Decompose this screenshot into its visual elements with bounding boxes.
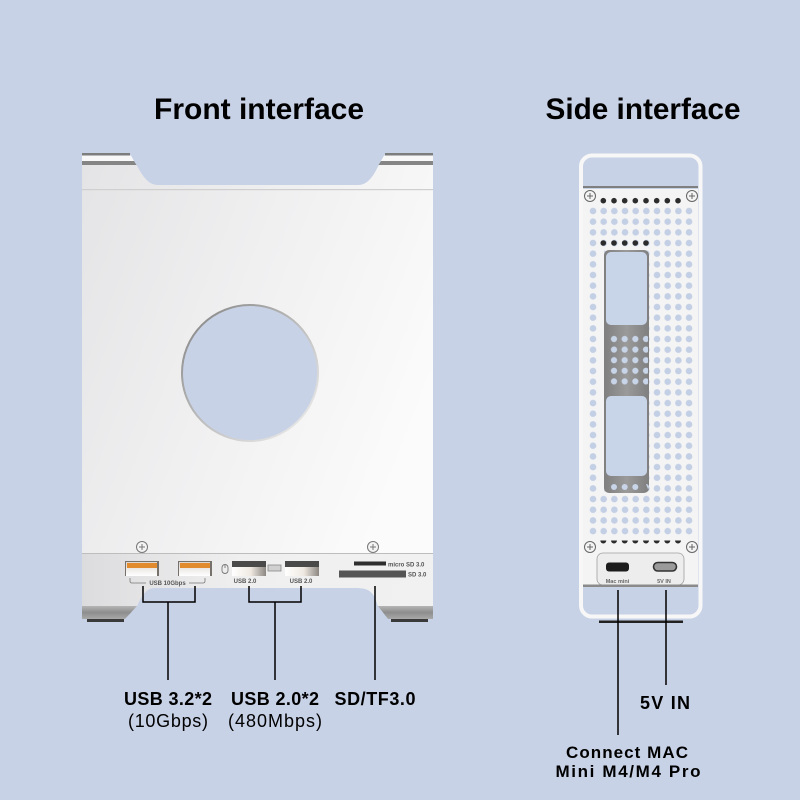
USB 2.0 labels: USB 2.0 [290,579,313,585]
front lower port band [82,553,433,606]
SD slot and label: SD 3.0 [408,572,427,578]
label: 5V IN: 5V IN [640,693,690,713]
side port panel [597,553,684,585]
connector lines: USB 3.2 [143,586,195,680]
USB 10Gbps bracket label [130,578,205,587]
label: Connect MAC Mini M4/M4 Pro [556,743,700,781]
connector line: SD [374,586,376,680]
front screws [136,542,378,552]
side foot [599,620,683,623]
label: USB 3.2*2 [124,689,212,731]
port labels [606,579,671,585]
front top tabs [82,153,433,161]
label: USB 2.0*2: USB 2.0*2 [231,689,319,709]
inner gray plate with windows [604,250,649,493]
title: side interface: Side interface [546,93,740,126]
micro SD slot and label: micro SD 3.0 [388,562,425,568]
label: Connect MAC Mini M4/M4 Pro: Connect MAC [566,743,688,762]
left leg [82,606,137,622]
USB 3.2 ports [125,561,212,576]
label: USB 3.2*2: USB 3.2*2 [124,689,212,709]
icon: mouse [222,564,228,574]
dark top holes [600,198,681,246]
USB-C port 5V IN [654,562,676,571]
side screws [584,190,698,552]
perforation holes [588,206,694,536]
title: front interface: Front interface [154,93,364,126]
port labels: 5V IN [657,579,671,585]
port labels: Mac mini [606,579,630,585]
perforated side body [583,189,698,585]
label: Connect MAC Mini M4/M4 Pro: Mini M4/M4 Pro [556,762,700,781]
right leg [378,606,433,622]
icon: keyboard [268,565,281,571]
USB 2.0 ports [232,561,319,576]
connector line: Mac mini [617,590,619,735]
centre circular cut-out [182,305,318,441]
label: SD/TF3.0: SD/TF3.0 [334,689,416,709]
USB 2.0 labels [234,579,313,585]
label: USB 3.2*2: (10Gbps) [128,711,208,731]
SD slot and label [339,570,427,578]
USB 2.0 labels: USB 2.0 [234,579,257,585]
USB 10Gbps bracket label: USB 10Gbps [149,581,186,587]
micro SD slot and label [354,562,425,568]
connector lines: USB 2.0 [249,586,301,680]
connector line: 5V IN [665,590,667,685]
panel: side view of enclosure [581,156,700,623]
label: USB 2.0*2: (480Mbps) [228,711,322,731]
solid strip beside window [598,248,604,495]
label: USB 2.0*2 [228,689,322,731]
front top gray bands [82,161,433,165]
front body [82,161,433,606]
panel: front view of enclosure [82,153,433,622]
side frame [581,156,700,616]
dark bottom half holes [600,540,681,544]
Thunderbolt port Mac mini [606,562,629,572]
